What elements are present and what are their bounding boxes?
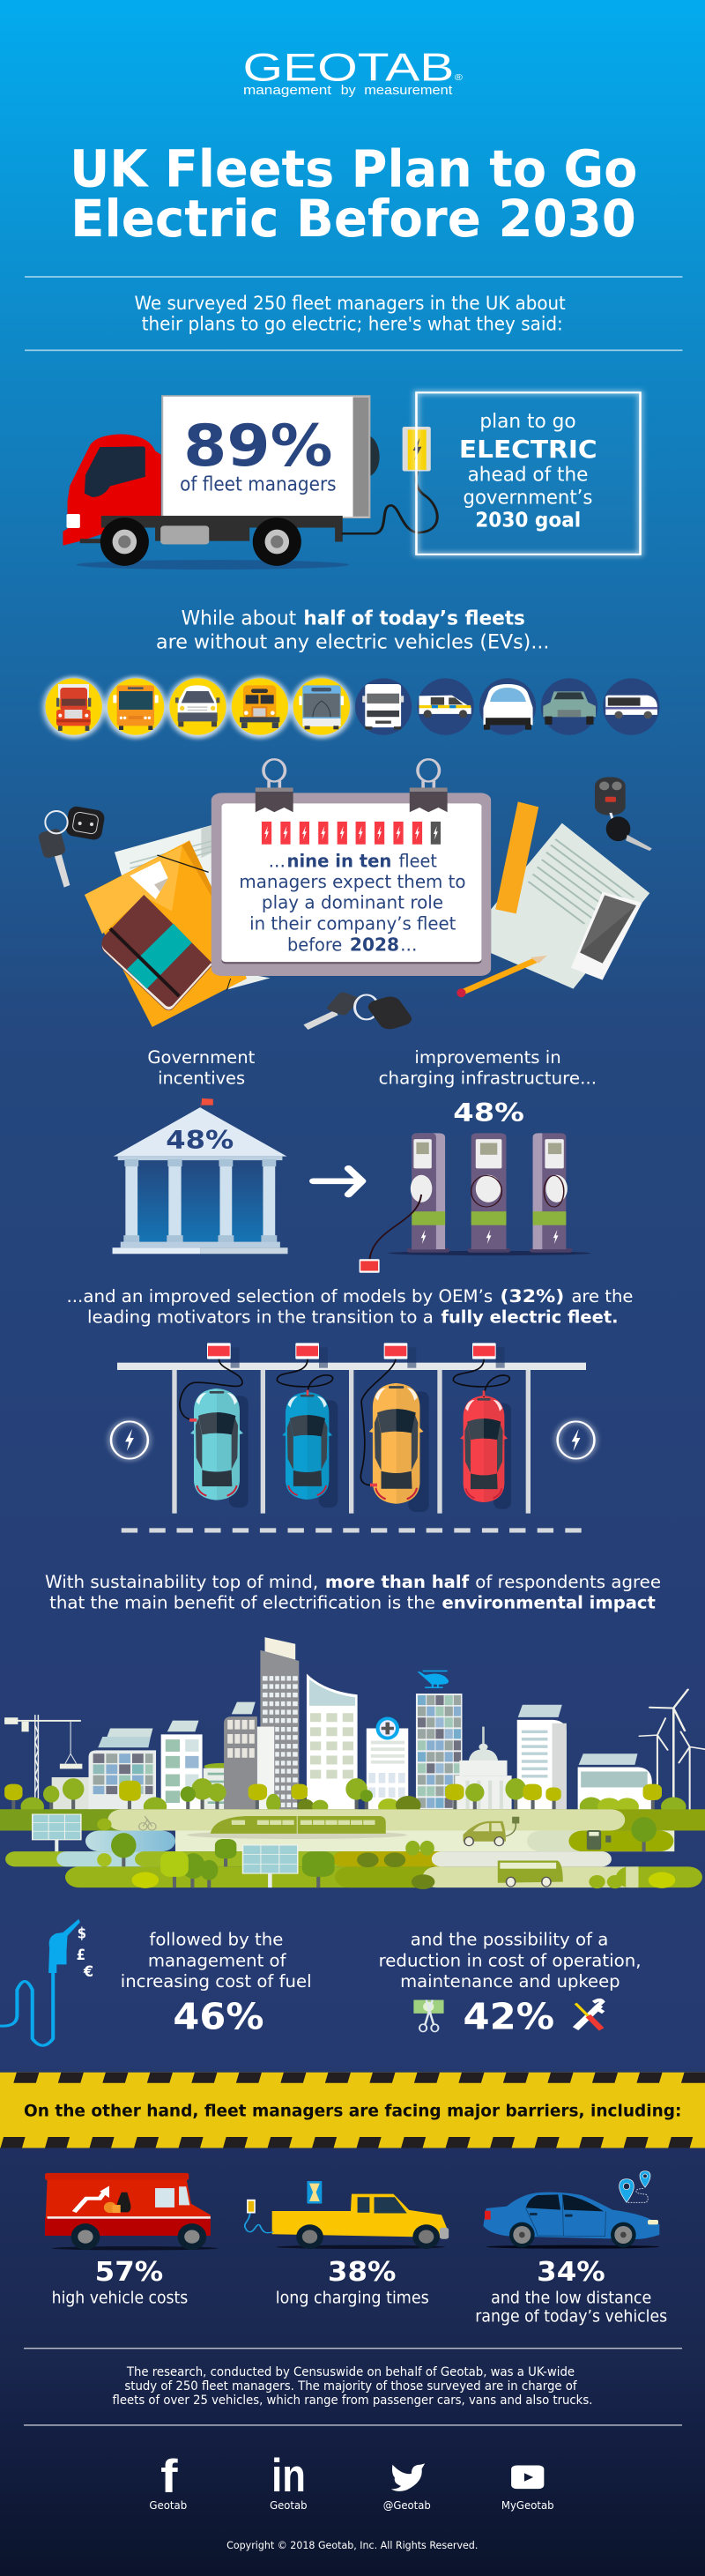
social: Facebook [149,2450,187,2512]
clipboard text: in their company’s fleet [249,913,456,934]
hazard stripes: top [13,2073,705,2083]
social: Twitter [383,2463,431,2512]
social: LinkedIn: in [271,2449,306,2502]
text: improved selection of models: ...and an improved selection of models by OEM’s [67,1287,493,1307]
copyright: Copyright © 2018 Geotab, Inc. All Rights Reserved. [226,2540,478,2551]
intro text: their plans to go electric; here's what they said: [142,313,563,335]
car shadows [229,1391,511,1512]
text: reduction in cost of operation: 42% [464,1996,554,2038]
icon: red delivery van [45,2173,218,2250]
intro text: We surveyed 250 fleet managers in the UK about [135,292,566,314]
clipboard text: fleet [399,851,437,872]
icon: glow ring behind yellow circles [43,676,352,739]
clipboard text: play a dominant role [262,892,443,913]
car: yellow [369,1383,424,1504]
binder clip: right [410,759,448,812]
car: red [460,1396,508,1502]
battery tally: nine of ten [262,822,441,845]
icon: blue car with map pins [483,2171,659,2249]
text: reduction in cost of operation: maintenance and upkeep [400,1972,620,1992]
electric car [464,1817,519,1846]
solar panel: center [243,1845,298,1887]
text: sustainability: With sustainability top of mind, [45,1573,318,1592]
icon: white truck [362,684,404,729]
helicopter [417,1671,449,1688]
desk items: paper, folder and notebook [85,825,271,1027]
car: teal [190,1389,243,1500]
stat: 34% low distance range: 34% [537,2255,605,2288]
stat: 38% long charging times: 38% [328,2255,396,2288]
text: improved selection of models: fully electric fleet. [442,1307,619,1327]
text: improved selection of models: are the [571,1287,633,1307]
icon: charging yellow pickup [245,2181,449,2249]
plug connectors [189,1390,485,1486]
charger 1 [407,1133,449,1253]
building: right low [578,1753,652,1809]
text: government incentives: incentives [158,1068,245,1089]
heading: half of fleets without EVs: half of today’s fleets [303,607,525,629]
stat: 48% charging: 48% [453,1098,524,1128]
arrow [314,1168,362,1195]
parking lot illustration [117,1343,586,1514]
social: LinkedIn [270,2449,307,2512]
logo: Geotab: management [243,82,331,98]
clipboard text [239,851,466,956]
wind turbines [640,1689,705,1809]
building: hospital [367,1716,408,1809]
text: increasing cost of fuel: followed by the [149,1931,283,1950]
stat: 38% long charging times: long charging times [276,2289,429,2308]
icon: school bus [240,685,279,728]
icon: lightning left [111,1421,148,1459]
icon: minibus [605,696,657,718]
text: sustainability: more than half [325,1573,469,1592]
vehicle icon row [43,676,659,739]
icon: lightning right [558,1421,594,1459]
cables [180,1359,509,1485]
barrier banner [0,2073,705,2148]
social: LinkedIn: Geotab [270,2499,307,2512]
ground bands [0,1809,705,1887]
building: stripes [517,1705,567,1809]
paper, ruler, phone and pencil [456,801,649,997]
social: Twitter: @Geotab [383,2499,431,2512]
text: reduction in cost of operation [379,1931,642,2038]
train [187,1816,407,1839]
text: government incentives: Government [147,1047,255,1068]
icon: fuel pump: £ [77,1947,85,1963]
social: YouTube: MyGeotab [501,2499,554,2512]
car: blue [282,1392,332,1500]
building: glass block [89,1728,156,1809]
building: curved white [307,1673,358,1809]
building: gray block [224,1702,257,1809]
building: low green roof [204,1763,240,1809]
icon: government building with 48% [113,1098,288,1254]
crane [4,1715,82,1803]
keys: top left [38,805,106,888]
icon: circles [46,678,659,735]
plug and cable [342,427,437,533]
icon: fuel pump: € [83,1962,93,1980]
of fleet managers: of fleet managers [180,473,337,495]
text: increasing cost of fuel [121,1931,312,2038]
text: charging infrastructure: charging infrastructure... [379,1068,597,1089]
stat: 38% long charging times [276,2255,429,2308]
heading: half of fleets without EVs: While about [182,607,296,629]
clipboard panel [212,759,491,976]
icon: charging stations [360,1133,590,1273]
icon: police van [419,696,471,718]
clipboard text: ... [400,934,417,956]
building: white block [161,1721,203,1809]
text: improved selection of models [67,1287,633,1327]
text: increasing cost of fuel: management of [148,1951,286,1970]
city illustration [0,1637,705,1889]
icon: orange bus [113,685,159,730]
text: charging infrastructure [379,1047,597,1089]
stat: 34% low distance range [475,2255,667,2326]
icon: red truck [56,684,91,731]
logo: Geotab: by [341,82,356,98]
charger 3 [530,1133,572,1253]
tower: gray skyscraper [260,1637,299,1809]
keys: bottom [303,991,415,1031]
charger 2 [468,1133,510,1253]
trees on the ground [97,1817,675,1889]
stat: 57% high vehicle costs: 57% [95,2255,163,2288]
intro text [135,292,566,335]
callout: plan to go electric: government’s [464,486,592,509]
heading: half of fleets without EVs [156,607,549,653]
text: government incentives [147,1047,255,1089]
icon: white van [175,685,219,726]
callout: plan to go electric: 2030 goal [475,509,581,532]
charging boxes [207,1343,496,1359]
social: Facebook: f [160,2450,178,2502]
icon: city bus [299,685,344,729]
logo: Geotab: measurement [364,82,453,98]
text: sustainability: that the main benefit of electrification is the [49,1594,435,1613]
stat: 57% high vehicle costs [52,2255,188,2308]
box shadows [231,1347,505,1368]
title [70,141,637,249]
hazard stripes: bottom [1,2137,693,2148]
icon: wrench and screwdriver [575,2000,604,2029]
truck illustration with 89% stat [63,396,380,570]
clipboard text: ... [269,851,286,872]
logo: Geotab: ® [455,73,464,83]
text: reduction in cost of operation: and the possibility of a [411,1931,608,1950]
clipboard text: before [287,934,342,956]
icon: fuel pump: $ [78,1925,86,1942]
clipboard text: nine in ten [287,851,391,872]
binder clip: left [256,759,293,812]
solar panel: left [33,1814,81,1851]
text: charging infrastructure: improvements in [414,1047,561,1068]
stat: 57% high vehicle costs: high vehicle costs [52,2289,188,2308]
icon: white car [483,684,533,730]
text: improved selection of models: leading motivators in the transition to a [87,1307,434,1327]
electric bus [498,1861,563,1887]
icon: classic car [543,691,596,725]
icon: scissors cutting money [413,2000,444,2032]
callout: plan to go electric: ELECTRIC [459,436,597,464]
text: improved selection of models: (32%) [500,1287,564,1307]
text: increasing cost of fuel: 46% [173,1996,263,2038]
research note [113,2365,592,2408]
89% figure: 89% [183,413,333,480]
cyclist [139,1816,156,1830]
trees and bushes behind the ground [4,1778,686,1816]
text: increasing cost of fuel: increasing cost of fuel [121,1972,312,1992]
keys: top right [595,778,652,851]
callout: plan to go electric [416,392,641,555]
icon: fuel pump [0,1919,93,2045]
social: Facebook: Geotab [149,2499,187,2512]
social: YouTube [501,2466,554,2512]
text: sustainability [45,1573,661,1613]
icon: government building with 48%: 48% [166,1126,234,1155]
clipboard text: 2028 [350,934,399,956]
callout: plan to go electric: ahead of the [468,463,588,486]
logo: Geotab: GEOTAB [243,45,454,89]
clipboard text: managers expect them to [239,872,466,893]
charging post [587,1830,611,1850]
tower: glass grid [416,1694,462,1809]
capitol building [455,1727,512,1809]
road dashes [122,1528,582,1533]
callout: plan to go electric: plan to go [479,409,576,432]
